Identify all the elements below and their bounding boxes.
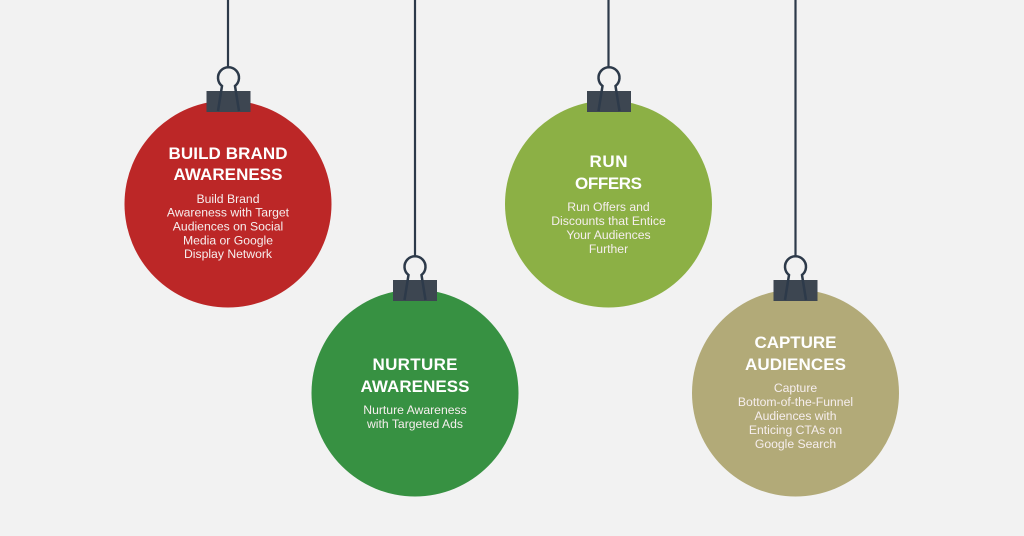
heading: nurture awareness: AWARENESS: [360, 377, 470, 396]
body: run offers: Run Offers and: [567, 200, 650, 214]
body: run offers: Discounts that Entice: [551, 214, 666, 228]
body: build brand awareness: Display Network: [184, 247, 273, 261]
string: capture audiences: [794, 0, 797, 256]
body: capture audiences: Enticing CTAs on: [749, 423, 842, 437]
body: capture audiences: Bottom-of-the-Funnel: [738, 395, 853, 409]
heading: capture audiences: CAPTURE: [754, 333, 836, 352]
body: build brand awareness: Awareness with Target: [167, 206, 290, 220]
icon: binder clip: [774, 256, 818, 301]
icon: binder clip: [587, 67, 631, 112]
body: capture audiences: Audiences with: [755, 409, 836, 423]
ball: tan: [692, 290, 899, 496]
string: build brand awareness: [227, 0, 229, 67]
ornament: capture audiences: [692, 0, 899, 496]
icon: binder clip: [206, 67, 250, 112]
ball: green: [312, 290, 518, 496]
body: build brand awareness: Audiences on Social: [173, 220, 283, 234]
ornament: nurture awareness: [312, 0, 518, 496]
body: build brand awareness: Build Brand: [196, 192, 260, 206]
ornament: build brand awareness: [124, 0, 332, 308]
body: build brand awareness: Media or Google: [183, 234, 273, 248]
heading: build brand awareness: AWARENESS: [174, 165, 282, 184]
heading: capture audiences: AUDIENCES: [745, 355, 846, 374]
body: capture audiences: Google Search: [755, 437, 836, 451]
icon: binder clip: [393, 256, 437, 301]
body: run offers: Further: [589, 242, 628, 256]
body: capture audiences: Capture: [774, 381, 817, 395]
body: nurture awareness: Nurture Awareness: [363, 403, 467, 417]
heading: run offers: RUN: [590, 152, 628, 171]
heading: build brand awareness: BUILD BRAND: [168, 144, 288, 163]
heading: nurture awareness: NURTURE: [372, 355, 458, 374]
ornament: run offers: [505, 0, 712, 308]
ball: red: [124, 100, 332, 308]
body: run offers: Your Audiences: [566, 228, 651, 242]
string: nurture awareness: [414, 0, 416, 256]
heading: run offers: OFFERS: [575, 174, 642, 193]
string: run offers: [607, 0, 610, 67]
ball: light green: [505, 100, 712, 308]
body: nurture awareness: with Targeted Ads: [366, 417, 463, 431]
